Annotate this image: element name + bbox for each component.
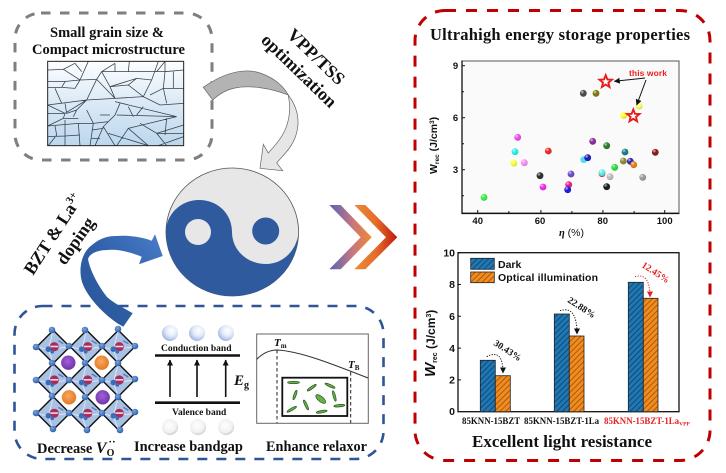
bar chart: 22.88% bbox=[565, 296, 597, 321]
label: BZT and La doping: doping bbox=[52, 213, 99, 268]
heading: grain size bbox=[32, 25, 185, 58]
label: BZT and La doping: BZT & La bbox=[20, 200, 80, 278]
scatter chart: W bbox=[428, 164, 440, 174]
bar chart: 6 bbox=[449, 311, 455, 323]
heading: ultrahigh energy storage: Ultrahigh energy storage properties bbox=[430, 25, 691, 44]
bar chart: 4 bbox=[449, 343, 455, 355]
heading: grain size: Compact microstructure bbox=[32, 42, 185, 58]
legend bbox=[471, 258, 598, 284]
stars: this work bbox=[600, 75, 640, 121]
bar chart: (J/cm bbox=[424, 318, 438, 352]
scatter chart: ) bbox=[428, 117, 440, 120]
band diagram: E bbox=[234, 373, 244, 389]
heading: grain size: Small grain size & bbox=[50, 25, 164, 41]
scatter chart: 3 bbox=[429, 120, 436, 124]
scatter chart: 80 bbox=[597, 216, 608, 227]
panel: microstructure bbox=[15, 13, 212, 160]
scatter chart: 60 bbox=[535, 216, 545, 227]
scatter chart: 40 bbox=[472, 216, 483, 227]
relaxor graph: B bbox=[355, 364, 360, 372]
category labels bbox=[462, 416, 690, 428]
grain microstructure image bbox=[48, 61, 184, 146]
scatter chart: 3 bbox=[453, 165, 458, 176]
drop annotations bbox=[487, 276, 650, 373]
label: Decrease Vo: Decrease V bbox=[37, 440, 107, 457]
relaxor graph bbox=[257, 334, 368, 423]
label: Increase bandgap: Increase bandgap bbox=[134, 439, 243, 455]
bar chart: W bbox=[422, 361, 439, 377]
callout: this work: this work bbox=[629, 68, 667, 78]
bar chart: 0 bbox=[449, 406, 455, 418]
bar chart bbox=[422, 248, 690, 428]
label: BZT and La doping bbox=[20, 190, 99, 278]
band diagram bbox=[155, 325, 249, 435]
bar chart: 12.45% bbox=[639, 261, 671, 286]
icon: chevrons bbox=[329, 205, 397, 269]
label: BZT and La doping: 3+ bbox=[64, 190, 80, 206]
callout: this work bbox=[614, 68, 667, 105]
bar chart: rec bbox=[432, 352, 439, 363]
category labels: VPP bbox=[679, 422, 690, 428]
category labels: 85KNN-15BZT bbox=[462, 416, 520, 426]
heading: excellent light resistance: Excellent light resistance bbox=[472, 432, 652, 451]
icon: yin-yang bbox=[166, 168, 299, 296]
category labels: 85KNN-15BZT-1La bbox=[604, 416, 679, 426]
label: Decrease Vo: O bbox=[107, 448, 115, 459]
scatter chart: (J/cm bbox=[428, 124, 440, 154]
panel: energy storage bbox=[415, 10, 710, 460]
relaxor graph: m bbox=[281, 342, 287, 350]
arrow: optimization gray arrow bbox=[203, 71, 298, 171]
arrow: doping blue arrow bbox=[80, 234, 163, 327]
label: VPP/TSS optimization: optimization bbox=[257, 30, 341, 112]
label: Enhance relaxor: Enhance relaxor bbox=[266, 439, 368, 455]
bar chart: 2 bbox=[449, 374, 455, 386]
legend: Dark bbox=[498, 259, 522, 271]
scatter chart: rec bbox=[434, 154, 441, 164]
scatter chart: 9 bbox=[453, 61, 458, 72]
crystal structure bbox=[33, 326, 138, 433]
data points bbox=[481, 90, 659, 201]
band diagram: Conduction band bbox=[161, 344, 232, 354]
panel: doping effects bbox=[14, 306, 384, 459]
category labels: 85KNN-15BZT-1La bbox=[524, 416, 600, 426]
bars bbox=[480, 282, 658, 412]
bar chart: 30.43% bbox=[491, 339, 523, 364]
relaxor graph: T bbox=[348, 359, 355, 371]
bar chart: ) bbox=[424, 310, 438, 314]
band diagram: g bbox=[244, 380, 249, 391]
bar chart: 8 bbox=[449, 279, 455, 291]
scatter chart: 6 bbox=[453, 113, 458, 124]
label: Decrease Vo: ·· bbox=[108, 436, 116, 448]
bar chart: 10 bbox=[443, 248, 455, 260]
scatter chart: 100 bbox=[657, 216, 673, 227]
scatter chart: η (%) bbox=[559, 227, 584, 239]
bar chart: 3 bbox=[426, 314, 433, 318]
scatter chart bbox=[428, 60, 680, 239]
legend: Optical illumination bbox=[498, 272, 598, 284]
polar nano-regions bbox=[286, 381, 345, 414]
relaxor graph: T bbox=[274, 337, 281, 349]
label: VPP/TSS optimization: VPP/TSS bbox=[283, 24, 349, 89]
band diagram: Valence band bbox=[172, 408, 227, 418]
